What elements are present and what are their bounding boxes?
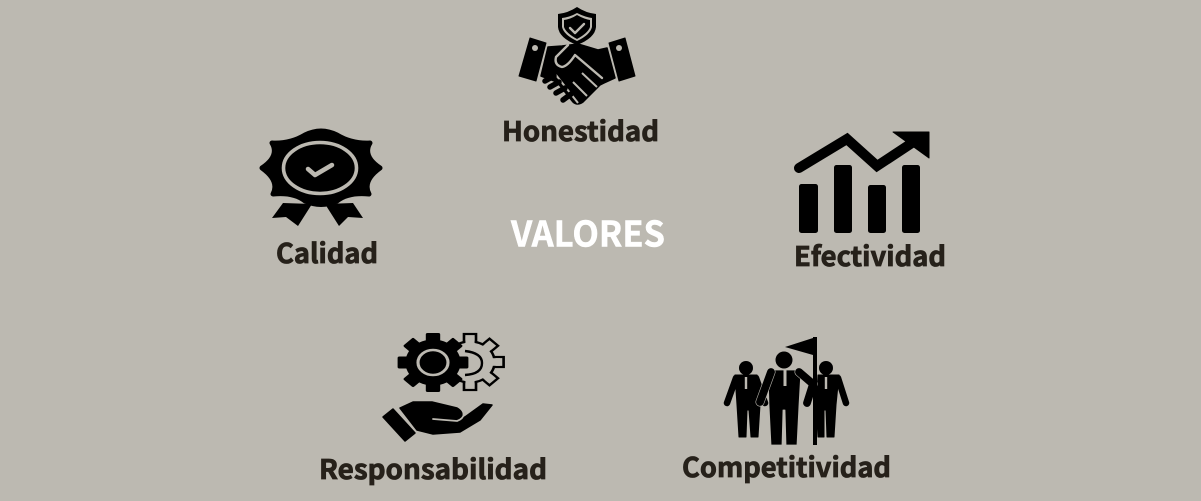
icon: handshake with shield [519,7,635,104]
label: Efectividad: Efectividad [794,235,946,274]
icon: rising bar chart with arrow [799,132,929,233]
icon: business team with flag [727,337,846,445]
icon: hand holding gears [383,333,504,441]
label: Responsabilidad: Responsabilidad [319,448,547,487]
value: Honestidad [502,7,659,149]
value: Responsabilidad [319,333,547,487]
value: Competitividad [682,337,891,485]
value: Calidad [262,131,380,271]
label: Competitividad: Competitividad [682,446,891,485]
icon: quality badge with check [262,131,380,226]
title: VALORES: VALORES [510,206,665,258]
value: Efectividad [794,132,946,274]
label: Honestidad: Honestidad [502,110,659,149]
label: Calidad: Calidad [276,232,378,271]
